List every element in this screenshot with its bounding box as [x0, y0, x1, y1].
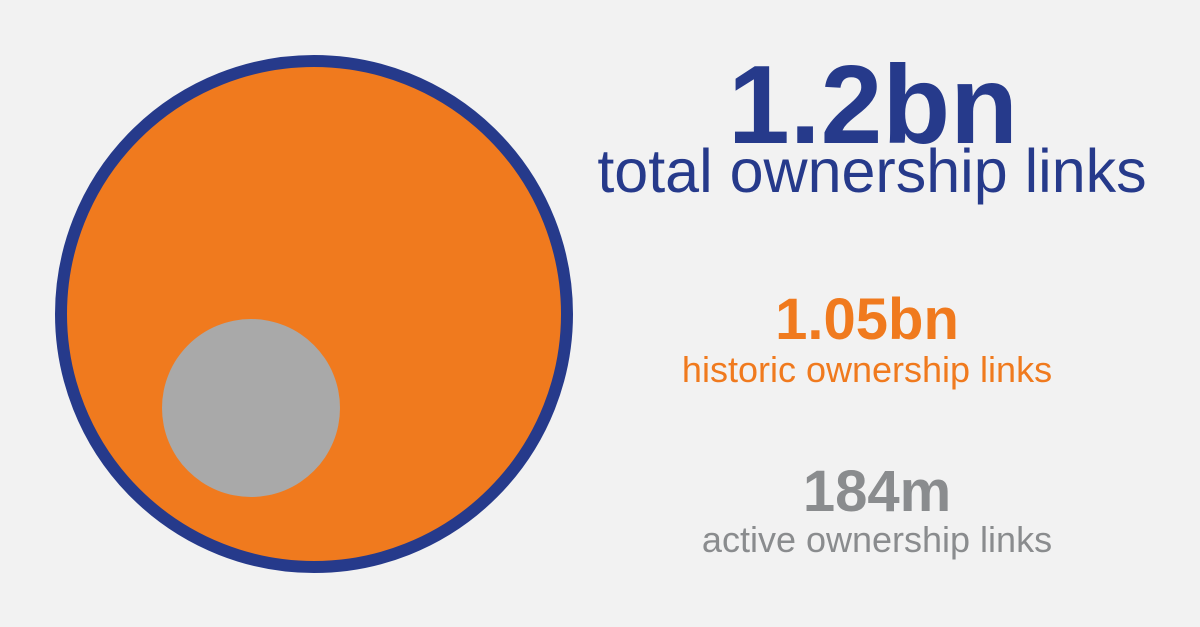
stat: 184m active: 184m	[803, 459, 951, 524]
label: active ownership links: active ownership links	[702, 519, 1052, 560]
label: historic ownership links: historic ownership links	[682, 349, 1052, 390]
stat: 1.2bn total: 1.2bn	[728, 43, 1018, 167]
circle: active ownership links (gray)	[162, 319, 340, 497]
stat: 1.05bn historic: 1.05bn	[775, 287, 959, 352]
label: total ownership links: total ownership links	[597, 137, 1147, 205]
circle: total ownership links (orange with navy border)	[61, 61, 567, 567]
